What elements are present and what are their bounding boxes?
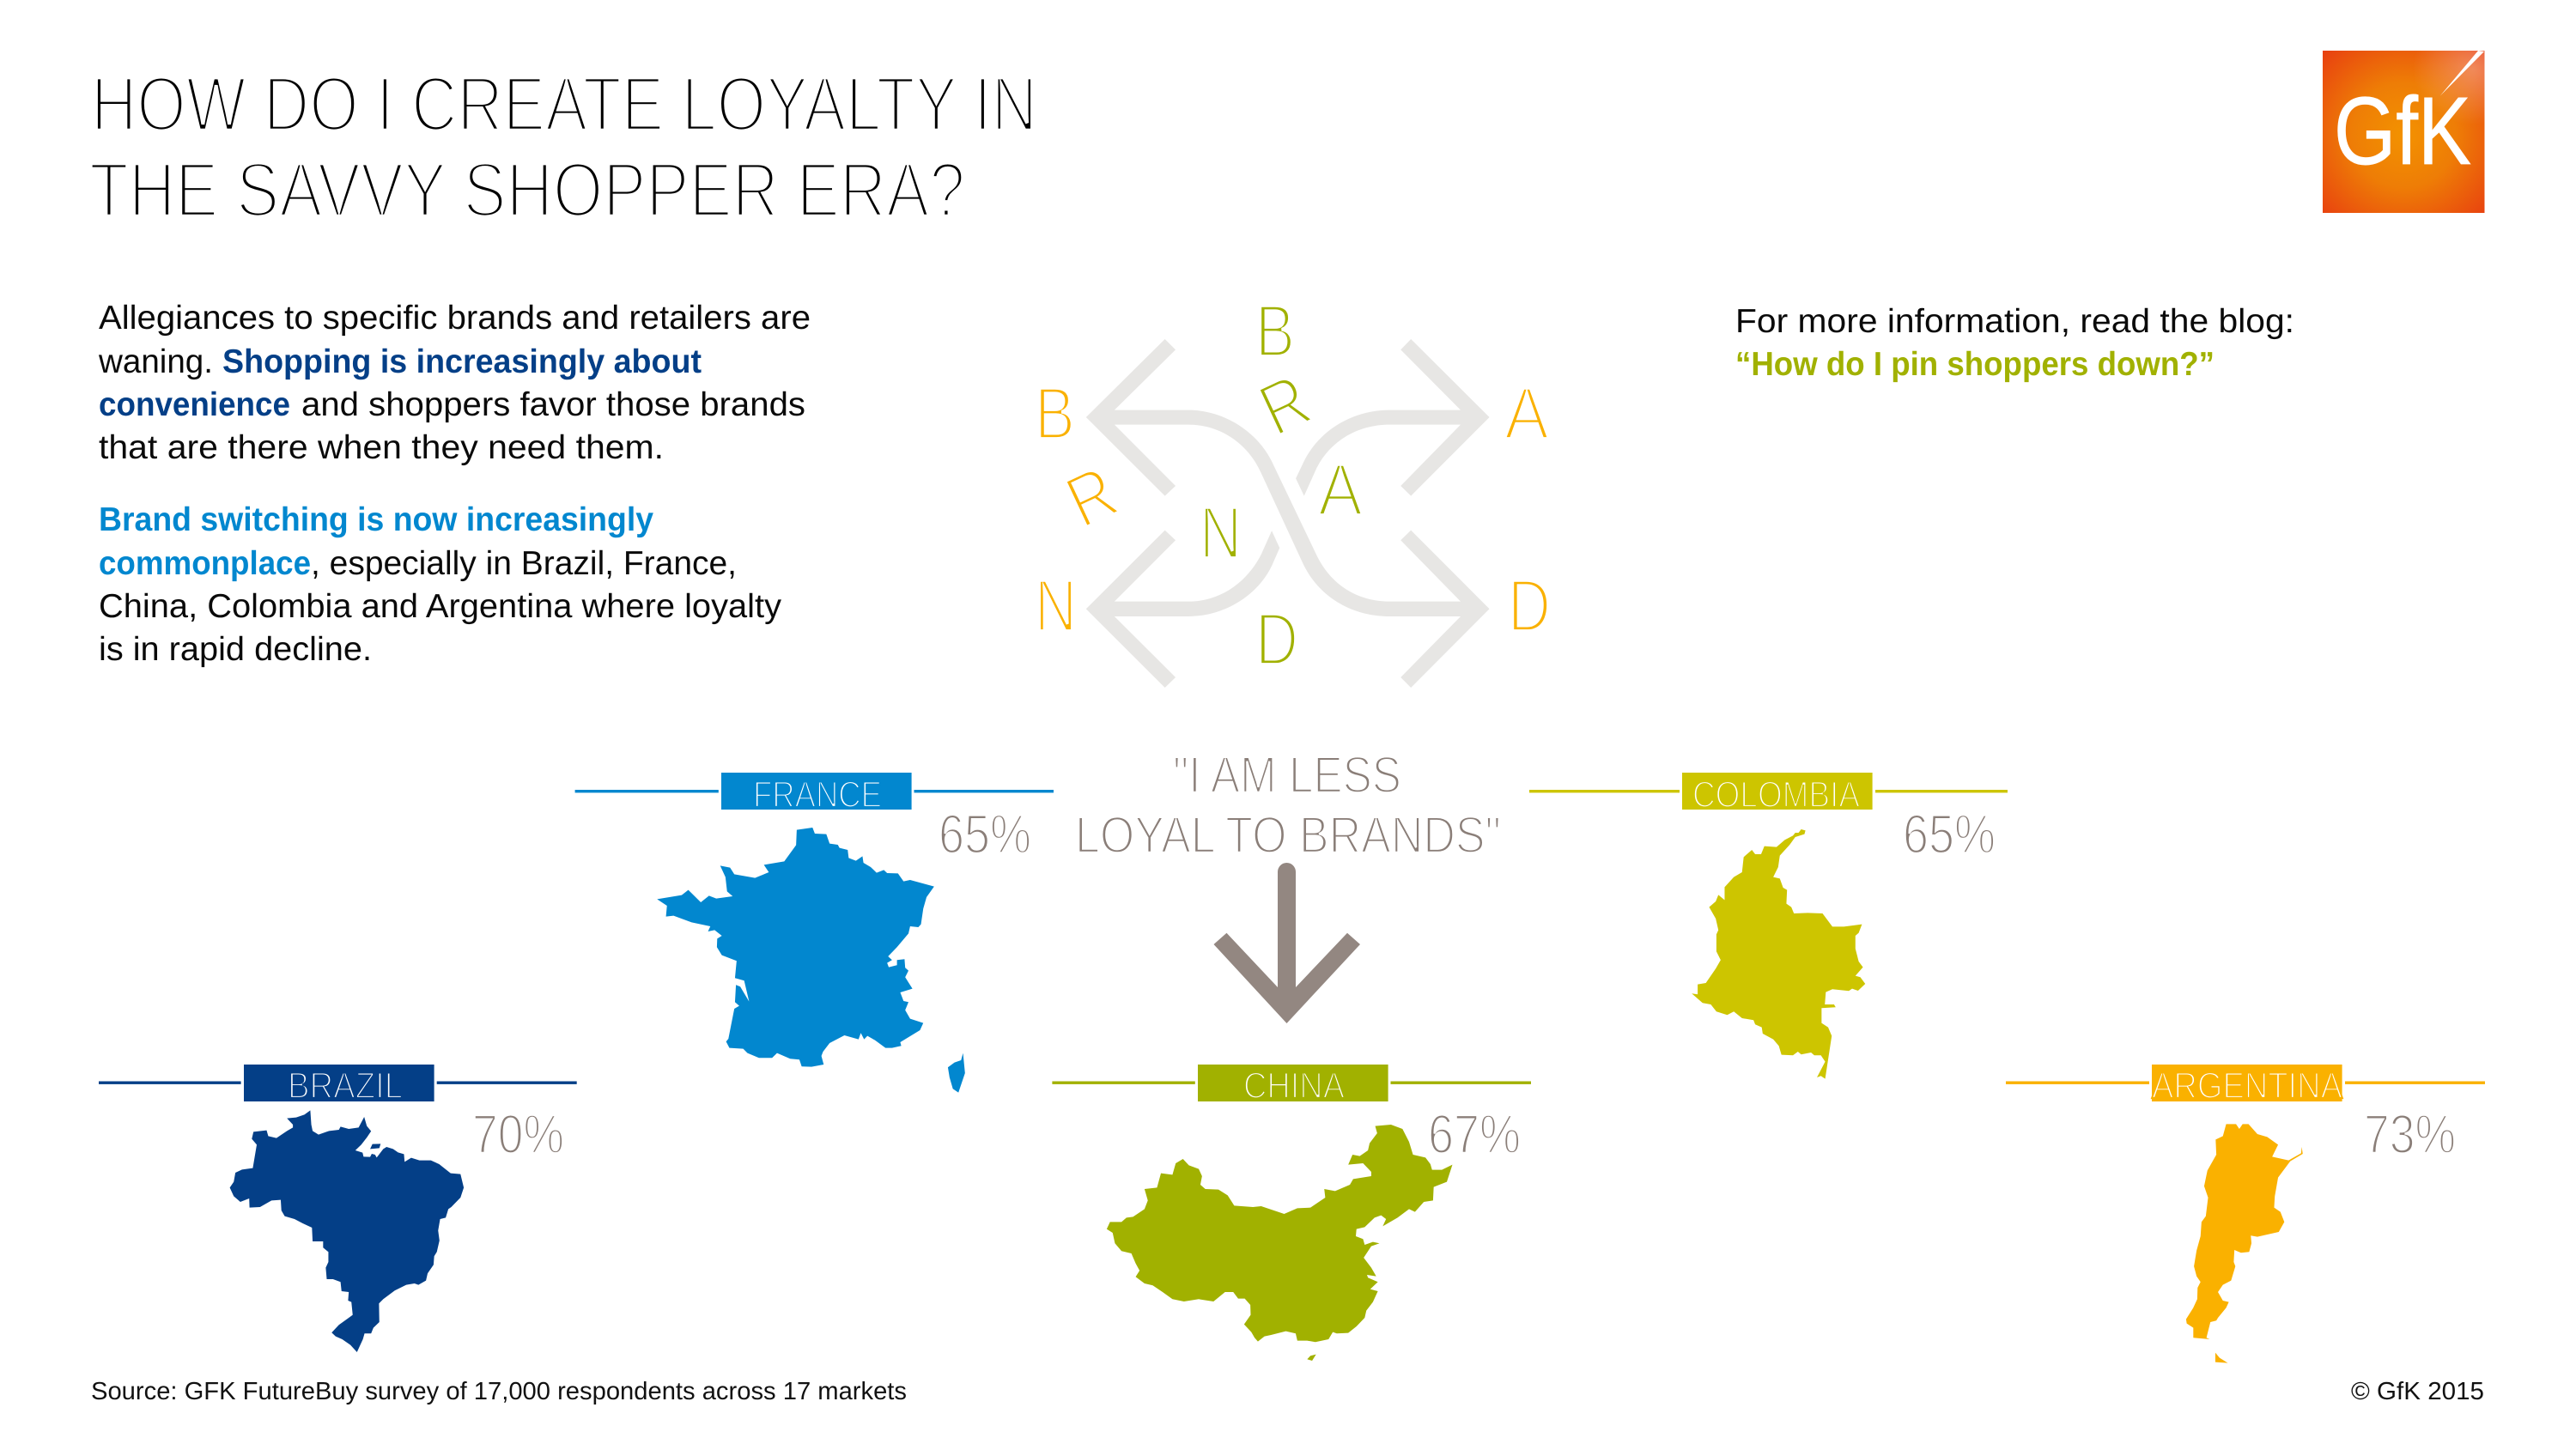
label: Brazil xyxy=(99,1065,577,1107)
letters: green BRAND: D xyxy=(1255,598,1298,681)
text block: intro paragraph one: convenience xyxy=(99,386,290,423)
title: HOW DO I CREATE LOYALTY IN xyxy=(91,62,1037,148)
label: Colombia xyxy=(1529,773,2008,816)
label: Brazil: BRAZIL xyxy=(288,1065,403,1107)
diagram: interlaced brand arrows xyxy=(1035,290,1551,688)
text block: intro paragraph two: , especially in Brazil, France, xyxy=(311,545,737,582)
label: China xyxy=(1052,1065,1531,1107)
value: Colombia 65%: 65% xyxy=(1903,804,1996,865)
text block: blog link: For more information, read the blog: xyxy=(1735,303,2294,340)
text block: intro paragraph two: Brand switching is now increasingly xyxy=(99,501,653,538)
title: THE SAVVY SHOPPER ERA? xyxy=(89,148,965,234)
quote: I am less loyal to brands: LOYAL TO BRANDS" xyxy=(1075,806,1501,864)
arrow: down xyxy=(1214,863,1360,1023)
text block: intro paragraph two xyxy=(99,501,781,668)
label: Argentina: ARGENTINA xyxy=(2152,1065,2342,1107)
label: France xyxy=(575,773,1054,816)
letters: green BRAND: N xyxy=(1200,492,1242,574)
label: France: FRANCE xyxy=(753,774,882,816)
value: Brazil 70%: 70% xyxy=(472,1103,564,1165)
text block: intro paragraph two: is in rapid decline. xyxy=(99,631,372,668)
text block: intro paragraph one: that are there when they need them. xyxy=(99,429,664,466)
label: Colombia: COLOMBIA xyxy=(1692,774,1860,816)
panel: France xyxy=(575,773,1054,1093)
source note: Source: GFK FutureBuy survey of 17,000 respondents across 17 markets xyxy=(91,1378,907,1405)
map: Brazil xyxy=(230,1110,464,1352)
icon: GfK logo xyxy=(2323,51,2485,213)
text block: intro paragraph two: China, Colombia and Argentina where loyalty xyxy=(99,588,781,625)
copyright: © GfK 2015 xyxy=(2351,1378,2484,1405)
text block: blog link xyxy=(1735,303,2294,383)
value: Argentina 73%: 73% xyxy=(2364,1103,2456,1165)
text block: intro paragraph one: and shoppers favor those brands xyxy=(301,386,805,423)
letters: green BRAND: R xyxy=(1248,359,1322,452)
text block: intro paragraph one xyxy=(98,300,811,466)
quote: I am less loyal to brands xyxy=(1075,746,1501,864)
text block: intro paragraph one: waning. xyxy=(98,343,213,380)
panel: China xyxy=(1052,1065,1531,1361)
title xyxy=(89,62,1037,234)
letters: orange BRAND xyxy=(1035,373,1551,647)
letters: orange BRAND: D xyxy=(1508,565,1551,647)
map: France xyxy=(657,828,965,1093)
letters: green BRAND: A xyxy=(1318,449,1364,531)
arrows: crossing grey chevrons xyxy=(1086,339,1490,688)
letters: orange BRAND: B xyxy=(1035,373,1075,455)
letters: orange BRAND: N xyxy=(1035,565,1077,647)
label: China: CHINA xyxy=(1243,1065,1345,1107)
icon: GfK logo: GfK xyxy=(2334,77,2471,185)
panel: Brazil xyxy=(99,1065,577,1352)
label: Argentina xyxy=(2006,1065,2485,1107)
text block: blog link: “How do I pin shoppers down?” xyxy=(1735,346,2215,383)
letters: green BRAND: B xyxy=(1255,290,1295,373)
letters: orange BRAND: A xyxy=(1504,373,1550,455)
panel: Argentina xyxy=(2006,1065,2485,1363)
map: China xyxy=(1107,1125,1452,1361)
letters: green BRAND xyxy=(1200,290,1364,681)
value: France 65%: 65% xyxy=(939,804,1031,865)
text block: intro paragraph one: Shopping is increasingly about xyxy=(222,343,702,380)
map: Argentina xyxy=(2186,1124,2303,1363)
value: China 67%: 67% xyxy=(1428,1103,1521,1165)
map: Colombia xyxy=(1692,829,1865,1079)
text block: intro paragraph one: Allegiances to specific brands and retailers are xyxy=(99,300,811,337)
quote: I am less loyal to brands: "I AM LESS xyxy=(1173,746,1401,804)
text block: intro paragraph two: commonplace xyxy=(99,545,311,582)
letters: orange BRAND: R xyxy=(1054,451,1129,544)
panel: Colombia xyxy=(1529,773,2008,1079)
